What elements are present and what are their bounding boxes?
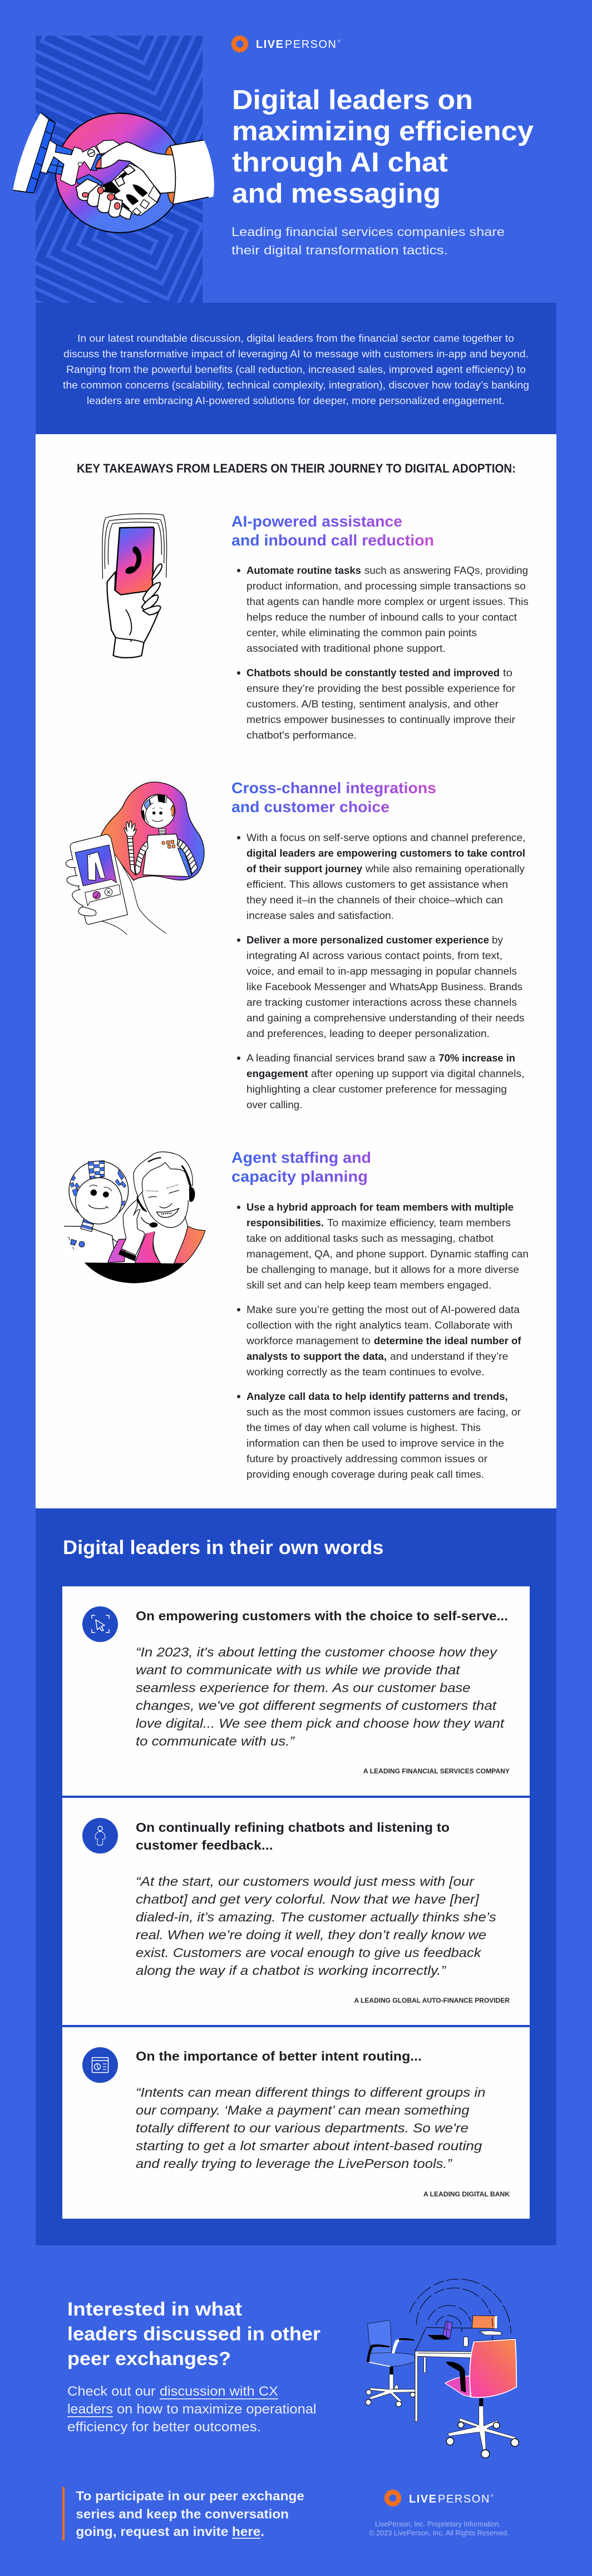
logo: LivePerson header [232,36,341,52]
bullet list: section 2: With a focus on self-serve options and channel preference, [246,832,526,843]
bullet list: section 2 [237,832,526,1110]
bullet list: section 2: while also remaining operationally [365,863,525,874]
bullet list: section 3 [237,1202,529,1480]
copyright [369,2520,509,2537]
bullet list: section 2: like Facebook Messenger and WhatsApp Business. Brands [246,981,522,992]
text block: discussion link [67,2384,317,2435]
bullet list: section 2: Deliver a more personalized customer experience [246,935,489,946]
heading: section 2: Cross-channel integrations [231,779,436,797]
bullet list: section 1: ensure they’re providing the best possible experience for [246,683,515,694]
quote text: starting to get a lot smarter about intent-based routing [136,2139,482,2153]
bullet list: section 2: after opening up support via digital channels, [311,1068,524,1079]
bullet list: section 1: center, while eliminating the common pain points [246,627,477,638]
bullet list: section 3: management, QA, and phone support. Dynamic staffing can [246,1248,529,1260]
robot thumb tip [96,140,120,154]
phone hand backdrop [85,854,166,935]
quote text: dialed-in, it’s amazing. The customer actually thinks she’s [136,1910,496,1924]
panel: intro: discuss the transformative impact of leveraging AI to message with customers in-app and beyond. [63,348,529,360]
bullet list: section 1: that agents can handle more complex or urgent issues. This [246,596,529,607]
card: intent routing quote [62,2027,530,2219]
agent hand [121,1199,145,1255]
quote text: real. When we’re doing it well, they don’t really know we [136,1928,486,1942]
robot neck [159,828,166,835]
title: maximizing efficiency [232,116,534,146]
bullet list: section 2: of their support journey [246,863,362,874]
robot arm base [13,113,55,193]
bullet list: section 1: to [503,667,512,679]
bullet list: section 3: be challenging to manage, but it allows for a more diverse [246,1264,519,1275]
heading: interested [67,2299,320,2369]
callout: request an invite: going, request an invite [76,2524,228,2539]
quote text: totally different to our various departments. So we're [136,2121,468,2135]
agent neck and face [142,1163,188,1234]
robot neck [81,1218,94,1232]
robot body [143,834,189,877]
icon: dashed person [82,1818,118,1854]
quote text: “In 2023, it's about letting the customer choose how they [136,1645,498,1659]
icon: dashboard window [82,2047,118,2083]
quote text: and really trying to leverage the LivePerson tools.” [136,2156,452,2171]
title [232,85,534,209]
heading: section 1 [231,513,434,549]
bullet list: section 2: 70% increase in [438,1053,515,1064]
bullet list: section 2: are tracking customer interactions across these channels [246,997,517,1008]
quote text: love digital... We see them pick and choose how they want [136,1716,505,1731]
table items [472,2316,497,2328]
copyright: LivePerson, Inc. Proprietary Information. [375,2520,501,2528]
heading: section 3: capacity planning [231,1168,368,1185]
card heading: customer feedback... [136,1838,273,1852]
agent hair [134,1152,193,1197]
speech bubble with buttons [85,884,121,906]
panel: key takeaways [36,434,556,1508]
panel: hero pattern [36,36,203,303]
callout: request an invite: To participate in our peer exchange [76,2489,304,2503]
bullet list: section 3: information can then be used to improve service in the [246,1438,504,1449]
bullet list: section 1: customers. A/B testing, sentiment analysis, and other [246,699,499,710]
card: chatbot quote [62,1798,530,2025]
bullet list: section 1: associated with traditional phone support. [246,643,446,654]
subtitle: Leading financial services companies share [231,225,505,239]
blue chair [366,2321,415,2407]
logo: LivePerson footer: LIVE [409,2493,436,2505]
bullet list: section 3: Analyze call data to help identify patterns and trends, [246,1391,508,1402]
logo: LivePerson header: ® [338,40,341,43]
card heading: On continually refining chatbots and listening to [136,1820,450,1835]
quote text: changes, we've got different segments of customers that [136,1698,497,1713]
bullet list: section 1 [237,565,529,741]
metal fingers [110,163,161,215]
robot fingers [76,179,132,219]
bullet list: section 3: such as the most common issues customers are facing, or [246,1407,521,1418]
bullet list: section 2: engagement [246,1068,308,1079]
heading: interested: peer exchanges? [67,2348,231,2369]
illustration: office chairs and table [366,2279,519,2458]
shirt cuff [166,146,175,155]
bullet list: section 3: determine the ideal number of [374,1335,522,1346]
agent microphone [141,1217,151,1225]
illustration: hand holding ringing phone [102,514,167,658]
logo: LivePerson footer: PERSON [438,2493,490,2505]
quote text: “Intents can mean different things to different groups in [136,2085,486,2100]
title: Digital leaders on [232,85,473,115]
heading: section 3: Agent staffing and [231,1149,371,1166]
heading: own words: Digital leaders in their own words [63,1537,384,1559]
subtitle [231,225,505,257]
text block: discussion link: leaders [67,2402,113,2417]
robot head [69,1161,129,1221]
agent clothing [108,1239,126,1262]
bullet list: section 2: A leading financial services brand saw a [246,1053,436,1064]
callout: request an invite [62,2487,304,2540]
bullet list: section 3: working correctly as the team continues to evolve. [246,1366,485,1378]
illustration: robot and human handshake [13,113,214,233]
subtitle: their digital transformation tactics. [231,243,448,257]
human hand [96,142,176,193]
card: intent routing quote: On the importance of better intent routing... [136,2049,422,2063]
phone [70,834,127,925]
quote text: want to communicate with us while we provide that [136,1663,461,1677]
quote text: chatbot] and get very colorful. Now that we have [her] [136,1892,480,1906]
panel: intro: In our latest roundtable discussion, digital leaders from the financial sector came together to [77,333,514,344]
bullet list: section 3: take on additional tasks such as messaging, chatbot [246,1233,494,1244]
table frame [415,2351,471,2422]
illustration: robot and headset agent [64,1152,205,1283]
robot arms [177,839,198,874]
bullet list: section 2: efficient. This allows customers to get assistance when [246,879,508,890]
heading: section 3 [231,1149,371,1185]
fingers [66,859,96,916]
red chair [445,2338,519,2458]
bullet list: section 2: highlighting a clear customer preference for messaging [246,1084,507,1095]
pants icon [87,852,105,881]
text block: discussion link: Check out our [67,2384,156,2399]
bullet list: section 1: Automate routine tasks [246,565,361,576]
quote text: exist. Customers are vocal enough to give us feedback [136,1945,482,1960]
robot body [64,1226,114,1262]
quote text: our company. ‘Make a payment’ can mean something [136,2103,470,2117]
logo: LivePerson header: PERSON [285,38,336,51]
icon: cursor in frame [82,1606,118,1642]
heading: interested: Interested in what [67,2299,242,2320]
bullet list: section 2: integrating AI across various contact points, from text, [246,950,502,961]
black joints [103,170,148,211]
title: and messaging [232,179,441,209]
card: chatbot quote: A LEADING GLOBAL AUTO-FINANCE PROVIDER [354,1997,510,2004]
bullet list: section 3: Use a hybrid approach for team members with multiple [246,1202,514,1213]
heading: section 1: AI-powered assistance [231,513,402,530]
agent face details [149,1190,179,1208]
callout: request an invite: here. [232,2524,264,2539]
title: through AI chat [232,148,448,178]
bullet list: section 3: workforce management to [246,1335,371,1346]
copyright: © 2023 LivePerson, Inc. All Rights Reserved. [369,2529,509,2537]
robot head [141,794,175,828]
heading: section 1: and inbound call reduction [231,532,434,549]
card: intent routing quote: A LEADING DIGITAL BANK [423,2190,510,2198]
bullet list: section 3: the times of day when call volume is highest. This [246,1422,481,1433]
bullet list: section 1: helps reduce the number of inbound calls to your contact [246,612,517,623]
bullet list: section 3: Make sure you’re getting the most out of AI-powered data [246,1304,520,1315]
heading: section 2 [231,779,436,815]
logo: LivePerson footer: ® [491,2494,494,2498]
bullet list: section 2: digital leaders are empowering customers to take control [246,848,525,859]
bullet list: section 3: collection with the right analytics team. Collaborate with [246,1320,512,1331]
bullet list: section 3: and understand if they’re [390,1351,508,1362]
text block: discussion link: efficiency for better outcomes. [67,2420,261,2435]
card: self-serve quote: On empowering customers with the choice to self-serve... [136,1609,508,1623]
quote text: “At the start, our customers would just mess with [our [136,1874,475,1889]
bullet list: section 1: product information, and processing simple transactions so [246,581,526,592]
panel: intro: Ranging from the powerful benefits (call reduction, increased sales, improved agent efficiency) to [66,364,526,375]
panel: leaders in their own words [36,1508,556,2245]
heading: interested: leaders discussed in other [67,2323,320,2344]
bullet list: section 2: they need it–in the channels of their choice–which can [246,894,503,906]
heading: key takeaways: KEY TAKEAWAYS FROM LEADERS ON THEIR JOURNEY TO DIGITAL ADOPTION: [77,461,516,475]
signal arcs [410,2279,511,2333]
card: self-serve quote [62,1586,530,1796]
panel: intro: leaders are embracing AI-powered solutions for deeper, more personalized engagement. [87,395,505,406]
bullet list: section 2: over calling. [246,1099,303,1110]
bullet list: section 3: skill set and can help keep team members engaged. [246,1280,491,1291]
bullet list: section 1: chatbot's performance. [246,730,357,741]
quote text [136,1645,505,1748]
bullet list: section 2: increase sales and satisfaction. [246,910,394,921]
card heading [136,1820,450,1852]
quote text: along the way if a chatbot is working incorrectly.” [136,1963,446,1978]
bullet list: section 3: To maximize efficiency, team members [327,1217,511,1228]
logo: LivePerson header: LIVE [256,38,283,51]
quote text: seamless experience for them. As our customer base [136,1680,471,1695]
text block: discussion link: on how to maximize operational [117,2402,317,2417]
logo: LivePerson footer [385,2490,494,2506]
card: self-serve quote: A LEADING FINANCIAL SERVICES COMPANY [363,1767,510,1775]
text block: discussion link: discussion with CX [160,2384,278,2399]
gradient circle [56,113,184,233]
bullet list: section 1: metrics empower businesses to continually improve their [246,714,515,725]
desk [85,1262,185,1283]
bullet list: section 1: such as answering FAQs, providing [364,565,528,576]
bullet list: section 3: providing enough coverage during peak call times. [246,1469,484,1480]
bullet list: section 2: by [492,935,503,946]
bullet list: section 3: future by proactively addressing common issues or [246,1453,487,1464]
bullet list: section 2: voice, and email to in-app messaging in popular channels [246,966,517,977]
callout: request an invite: series and keep the conversation [76,2507,289,2521]
quote text [136,1874,496,1978]
illustration: phone and waving robot [66,782,204,935]
panel: intro: the common concerns (scalability, technical complexity, integration), discover how today’s banking [63,380,529,391]
quote text [136,2085,486,2171]
robot arm [55,145,72,157]
quote text: to communicate with us.” [136,1734,295,1748]
bullet list: section 2: and gaining a comprehensive understanding of their needs [246,1012,524,1024]
bullet list: section 2: and preferences, leading to deeper personalization. [246,1028,490,1039]
bullet list: section 3: responsibilities. [246,1217,324,1228]
panel: intro [36,303,556,434]
bullet list: section 1: Chatbots should be constantly tested and improved [246,667,500,679]
heading: section 2: and customer choice [231,798,389,815]
bullet list: section 3: analysts to support the data, [246,1351,387,1362]
